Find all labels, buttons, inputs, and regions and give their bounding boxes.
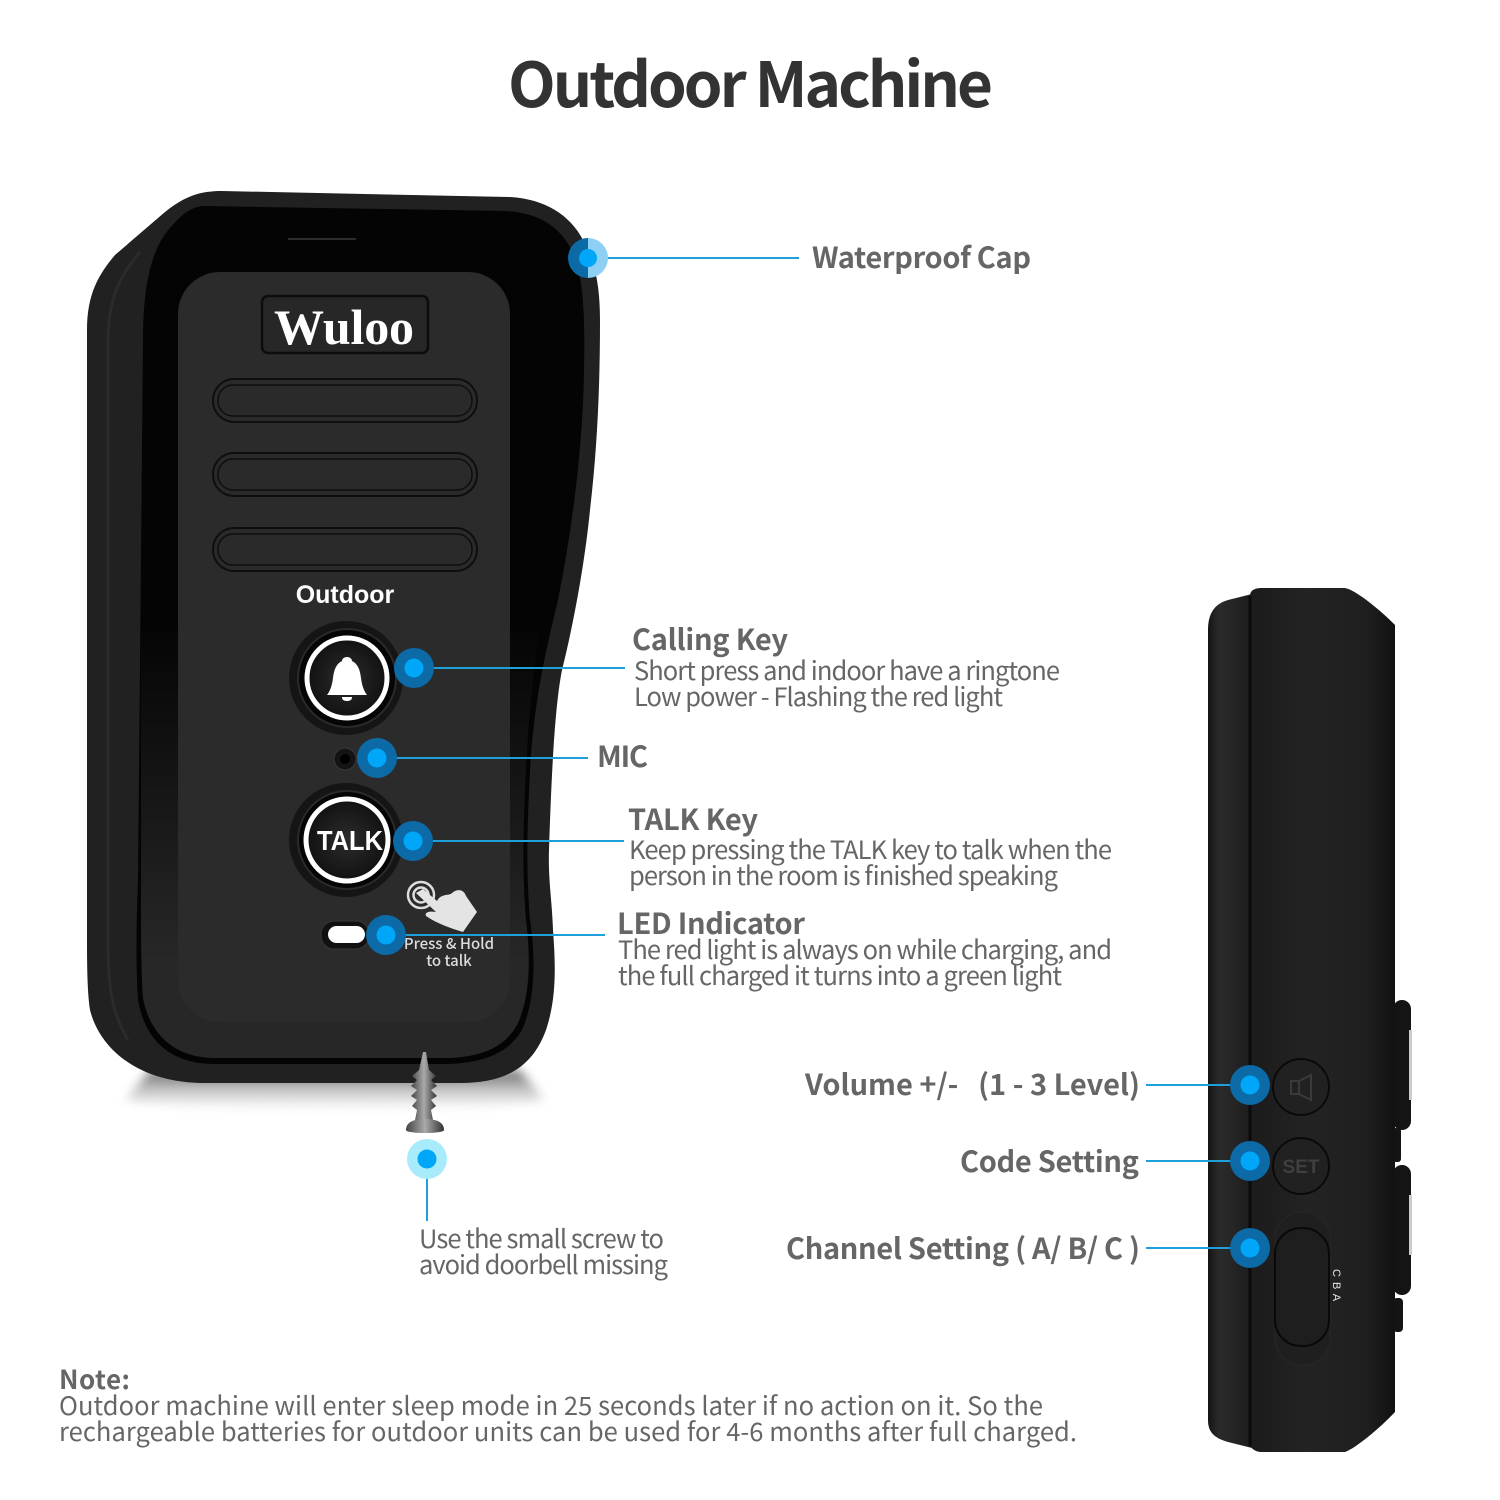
front view of outdoor machine (87, 191, 600, 1133)
callout: talk key: person in the room is finished speaking (629, 856, 1059, 893)
callout: calling key (394, 617, 1060, 714)
main body (1250, 588, 1395, 1452)
callout: calling key: Low power - Flashing the red light (634, 677, 1003, 714)
callout: calling key: Calling Key (632, 617, 788, 659)
note text block: Outdoor machine will enter sleep mode in 25 seconds later if no action on it. So the (59, 1386, 1043, 1423)
icon: pressing hand (408, 882, 477, 932)
callout: screw (407, 1139, 669, 1282)
callout: microphone: MIC (597, 734, 648, 776)
icon: bell (327, 657, 367, 701)
press and hold text: to talk (426, 950, 472, 971)
side buttons (1393, 1000, 1412, 1332)
side view of outdoor machine (1208, 588, 1412, 1452)
LED indicator (321, 921, 369, 949)
talk button (289, 783, 403, 897)
callout: screw: avoid doorbell missing (419, 1245, 669, 1282)
waterproof cap shell (87, 191, 600, 1083)
cap inner cavity (136, 206, 584, 1064)
callout: talk key (393, 797, 1112, 893)
note text block: Note: (59, 1360, 130, 1397)
channel slider (1275, 1212, 1342, 1365)
callout: volume: Volume +/- (1 - 3 Level) (804, 1062, 1140, 1104)
lower bezel (141, 600, 545, 1058)
outdoor label: Outdoor (296, 581, 395, 609)
callout: waterproof cap: Waterproof Cap (812, 235, 1031, 277)
callout: waterproof cap (568, 235, 1031, 278)
top recess mark (288, 238, 356, 240)
volume button (1273, 1059, 1329, 1115)
set button: SET (1283, 1157, 1320, 1178)
logo plate: Wuloo (274, 299, 414, 355)
callout: screw: Use the small screw to (419, 1219, 664, 1256)
body edge (1248, 596, 1252, 1446)
faceplate (178, 272, 510, 1022)
callout: code setting: Code Setting (960, 1139, 1139, 1181)
callout: calling key: Short press and indoor have a ringtone (634, 651, 1060, 688)
calling button (289, 621, 403, 735)
note text block: rechargeable batteries for outdoor units can be used for 4-6 months after full charged. (59, 1412, 1077, 1449)
channel slider: C B A (1330, 1269, 1342, 1302)
talk button: TALK (317, 825, 383, 856)
callout: LED indicator: the full charged it turns into a green light (618, 956, 1062, 993)
callout: channel setting: Channel Setting ( A/ B/ C ) (786, 1226, 1140, 1268)
callout: LED indicator: LED Indicator (617, 901, 805, 943)
rear section (1208, 594, 1252, 1448)
press and hold text (404, 933, 494, 971)
press and hold text: Press & Hold (404, 933, 494, 954)
callout: LED indicator (366, 901, 1112, 993)
callout: microphone (357, 734, 648, 778)
note text block (59, 1360, 1077, 1449)
cap left ridge (108, 252, 140, 1040)
callout: code setting (960, 1139, 1270, 1181)
mounting screw (406, 1052, 444, 1133)
floor shadow (125, 1070, 545, 1109)
callout: LED indicator: The red light is always on while charging, and (618, 930, 1112, 967)
set button (1273, 1138, 1329, 1194)
callout: talk key: Keep pressing the TALK key to talk when the (629, 830, 1112, 867)
icon: speaker (1291, 1075, 1311, 1100)
speaker slots (213, 379, 477, 571)
title: Outdoor Machine (508, 35, 993, 125)
callout: talk key: TALK Key (628, 797, 758, 839)
microphone hole (334, 748, 356, 770)
